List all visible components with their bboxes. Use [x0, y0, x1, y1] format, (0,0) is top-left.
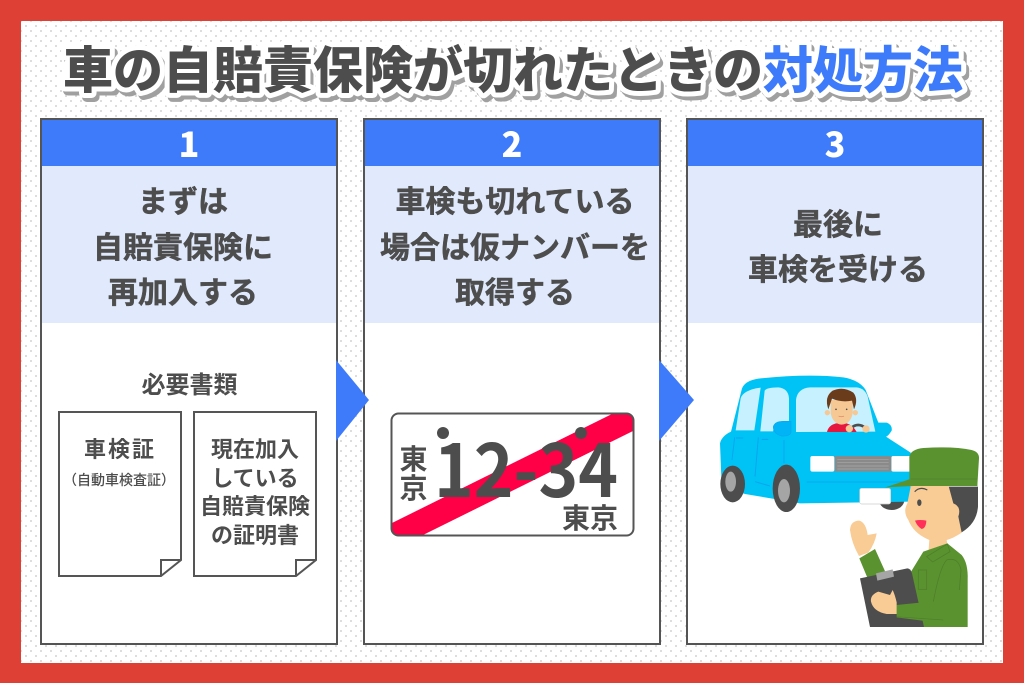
inspector: [850, 447, 979, 627]
illustration: car and inspector: [720, 376, 979, 627]
document: insurance certificate: [194, 412, 316, 576]
required documents label: 必要書類: [142, 365, 238, 400]
panel 2 number header: [365, 118, 659, 167]
panel 3 heading: 最後に: [793, 200, 883, 244]
panel 1 heading: [42, 166, 336, 323]
document: insurance certificate: 自賠責保険: [200, 489, 310, 521]
blue car with driver: [720, 376, 911, 512]
panel 2 heading: 取得する: [455, 268, 575, 312]
panel 3 heading: 車検を受ける: [748, 245, 928, 289]
panel 2: [364, 118, 660, 644]
arrow: step 2 to 3: [659, 360, 694, 441]
panel 3: [687, 118, 983, 644]
document: vehicle inspection certificate: 車検証: [84, 432, 156, 464]
arrow: step 1 to 2: [336, 360, 369, 441]
document: vehicle inspection certificate: （自動車検査証）: [63, 470, 175, 490]
document: insurance certificate: している: [211, 461, 299, 493]
crossed out license plate: 東京: [562, 497, 618, 537]
panel 1 number header: 1: [179, 118, 199, 167]
title: 車の自賠責保険が切れたときの対処方法: [63, 31, 963, 103]
panel 1 number header: [42, 118, 336, 167]
document: insurance certificate: の証明書: [211, 518, 299, 550]
crossed out license plate: 京: [399, 467, 428, 507]
crossed out license plate: 12-34: [434, 413, 618, 519]
panel 2 heading: [365, 166, 659, 323]
panel 2 heading: 車検も切れている: [395, 177, 635, 221]
driver: [825, 389, 870, 433]
panel 3 heading: [688, 166, 982, 323]
panel 1 heading: まずは: [138, 177, 228, 221]
panel 1: [41, 118, 337, 644]
panel 1 heading: 再加入する: [108, 268, 258, 312]
title: 車の自賠責保険が切れたときの対処方法: [66, 35, 966, 107]
document: vehicle inspection certificate: [59, 412, 181, 576]
document: insurance certificate: 現在加入: [211, 432, 299, 464]
panel 2 heading: 場合は仮ナンバーを: [380, 223, 650, 267]
panel 1 heading: 自賠責保険に: [93, 223, 273, 267]
crossed out license plate: 東: [399, 438, 428, 478]
panel 3 number header: [688, 118, 982, 167]
title: 車の自賠責保険が切れたときの対処方法: [63, 31, 963, 103]
panel 3 number header: 3: [825, 118, 845, 167]
panel 2 number header: 2: [502, 118, 522, 167]
